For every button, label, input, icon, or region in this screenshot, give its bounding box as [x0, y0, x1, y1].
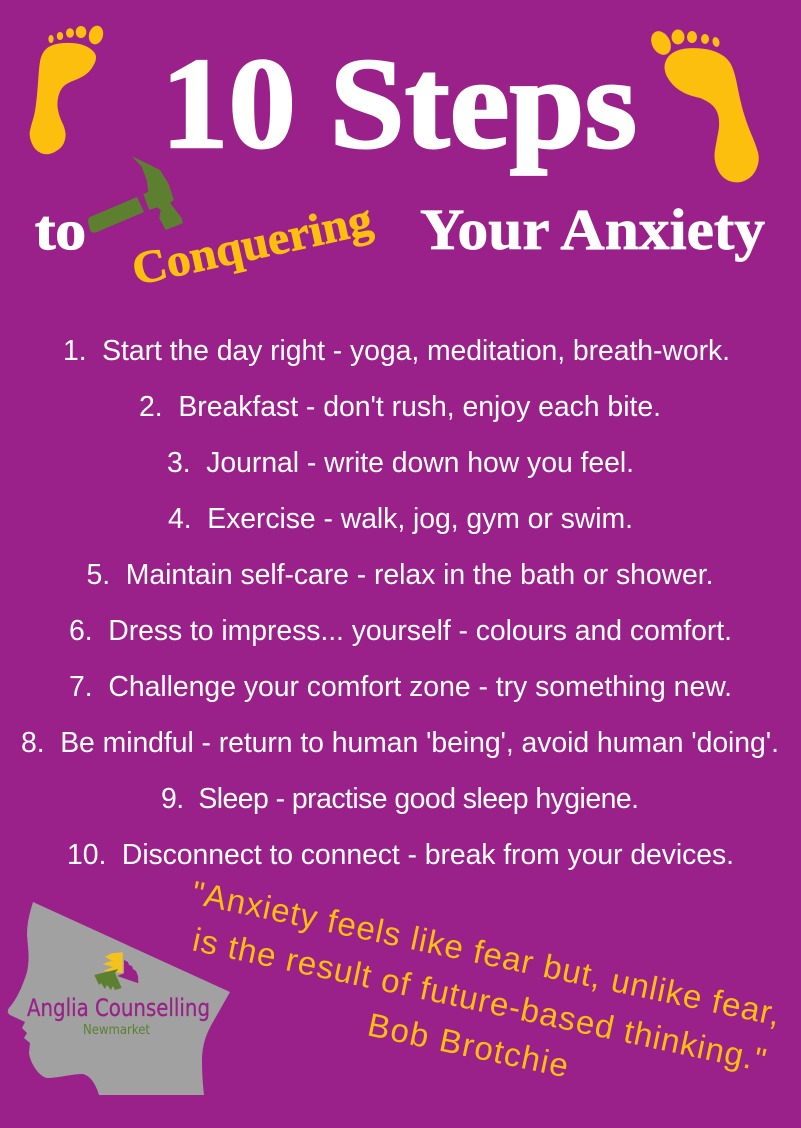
icon: left footprint: [30, 24, 105, 154]
title: 10 Steps: [161, 32, 637, 176]
logo: purple hand: [117, 960, 138, 983]
logo text: Anglia Counselling: Anglia Counselling: [27, 994, 210, 1022]
logo: green hand: [94, 969, 122, 990]
step 8: 8. Be mindful - return to human 'being', avoid human 'doing'.: [21, 727, 779, 759]
step 10: 10. Disconnect to connect - break from your devices.: [67, 839, 734, 871]
subtitle: to: to: [35, 200, 86, 262]
subtitle: Your Anxiety: Your Anxiety: [420, 197, 765, 262]
quote line 3: Bob Brotchie: [365, 1006, 572, 1084]
step 3: 3. Journal - write down how you feel.: [167, 447, 634, 479]
subtitle: Conquering: Conquering: [127, 193, 377, 295]
logo text: Newmarket: Newmarket: [83, 1023, 150, 1038]
quote: [189, 874, 783, 1084]
quote line 1: "Anxiety feels like fear but, unlike fear,: [189, 874, 783, 1033]
logo: grey head silhouette: [8, 902, 230, 1095]
step 9: 9. Sleep - practise good sleep hygiene.: [161, 783, 639, 815]
step 7: 7. Challenge your comfort zone - try something new.: [69, 671, 732, 703]
icon: hammer: [88, 156, 183, 233]
step 2: 2. Breakfast - don't rush, enjoy each bite.: [139, 391, 661, 423]
step 5: 5. Maintain self-care - relax in the bath or shower.: [86, 559, 714, 591]
step 6: 6. Dress to impress... yourself - colours and comfort.: [69, 615, 732, 647]
icon: right footprint: [647, 28, 759, 182]
quote line 2: is the result of future-based thinking.": [190, 921, 769, 1078]
logo: yellow hand: [103, 952, 123, 973]
step 4: 4. Exercise - walk, jog, gym or swim.: [168, 503, 633, 535]
steps list: [21, 335, 779, 871]
step 1: 1. Start the day right - yoga, meditation, breath-work.: [63, 335, 730, 367]
